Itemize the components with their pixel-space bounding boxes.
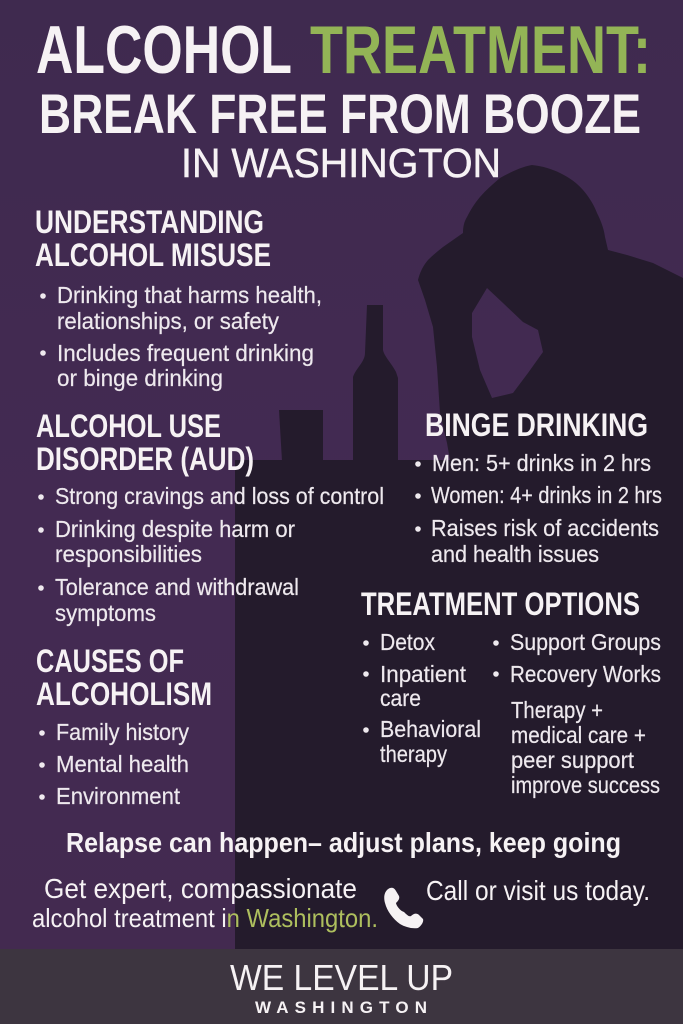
bullet list: binge: Men: 5+ drinks in 2 hrs bbox=[432, 450, 651, 476]
callout: relapse: Relapse can happen– adjust plans, keep going bbox=[66, 827, 621, 858]
heading: alcohol use disorder bbox=[36, 408, 254, 477]
icon: phone bbox=[384, 888, 423, 928]
bullet list: misuse bbox=[40, 282, 322, 391]
bullet list: AUD: Tolerance and withdrawal bbox=[55, 574, 299, 600]
text block: recovery note: peer support bbox=[511, 747, 635, 773]
bullet list: AUD: symptoms bbox=[55, 600, 156, 626]
bullet list: misuse: or binge drinking bbox=[57, 365, 223, 391]
bullet list: binge: and health issues bbox=[431, 541, 599, 567]
logo: washington: WASHINGTON bbox=[255, 998, 427, 1017]
bullet list: misuse: relationships, or safety bbox=[57, 308, 279, 334]
heading: causes of alcoholism bbox=[36, 643, 212, 712]
bullet list: binge bbox=[415, 450, 662, 567]
bullet list: treatment column one: Inpatient bbox=[380, 661, 467, 687]
bullet list: causes: Family history bbox=[56, 719, 189, 745]
bullet list: causes: Environment bbox=[56, 783, 181, 809]
call to action: expert treatment: Get expert, compassionate bbox=[44, 873, 357, 904]
text block: recovery note: medical care + bbox=[511, 722, 646, 748]
footer band bbox=[0, 949, 683, 1024]
bullet list: AUD bbox=[38, 483, 384, 626]
bullet list: AUD: responsibilities bbox=[55, 541, 202, 567]
heading: alcohol use disorder: ALCOHOL USE bbox=[36, 408, 221, 444]
text block: recovery note: improve success bbox=[511, 772, 660, 798]
bullet list: AUD: Drinking despite harm or bbox=[55, 516, 295, 542]
call to action: call or visit: Call or visit us today. bbox=[426, 875, 650, 906]
text block: recovery note bbox=[511, 697, 660, 798]
bullet list: treatment column one: care bbox=[380, 685, 421, 711]
bullet list: treatment column one: therapy bbox=[380, 741, 447, 767]
logo: we level up: WE LEVEL UP bbox=[230, 957, 453, 998]
heading: causes of alcoholism: ALCOHOLISM bbox=[36, 676, 212, 712]
silhouette: person, bottle and table bbox=[235, 165, 683, 949]
bullet list: causes: Mental health bbox=[56, 751, 189, 777]
bullet list: treatment column one: Detox bbox=[380, 629, 435, 655]
bullet list: treatment column one: Behavioral bbox=[380, 716, 481, 742]
silhouette: glass bbox=[279, 410, 323, 461]
heading: understanding alcohol misuse bbox=[35, 204, 271, 273]
call to action: expert treatment bbox=[32, 873, 378, 933]
heading: alcohol use disorder: DISORDER (AUD) bbox=[36, 441, 254, 477]
silhouette: table bbox=[235, 460, 455, 949]
title bbox=[36, 12, 651, 186]
bullet list: misuse: Drinking that harms health, bbox=[57, 282, 322, 308]
panel: treatment options bbox=[361, 586, 661, 798]
bullet list: treatment column two: Support Groups bbox=[510, 629, 661, 655]
silhouette: bottle bbox=[353, 305, 398, 461]
bullet list: treatment column one bbox=[363, 629, 481, 767]
bullet list: treatment column two bbox=[493, 629, 661, 687]
panel: binge drinking bbox=[415, 407, 662, 567]
panel: understanding alcohol misuse bbox=[35, 204, 322, 391]
bullet list: binge: Raises risk of accidents bbox=[431, 515, 659, 541]
silhouette: person with head in hand bbox=[418, 165, 683, 949]
text block: recovery note: Therapy + bbox=[511, 697, 603, 723]
bullet list: AUD: Strong cravings and loss of control bbox=[55, 483, 384, 509]
heading: causes of alcoholism: CAUSES OF bbox=[36, 643, 184, 679]
panel: causes of alcoholism bbox=[36, 643, 212, 809]
call to action: expert treatment: alcohol treatment in Washington. bbox=[32, 903, 378, 933]
heading: understanding alcohol misuse: UNDERSTANDING bbox=[35, 204, 264, 240]
heading: understanding alcohol misuse: ALCOHOL MISUSE bbox=[35, 237, 271, 273]
bullet list: misuse: Includes frequent drinking bbox=[57, 340, 314, 366]
title: IN WASHINGTON bbox=[181, 140, 501, 186]
title: ALCOHOL bbox=[36, 12, 292, 88]
panel: alcohol use disorder bbox=[36, 408, 384, 626]
bullet list: causes bbox=[39, 719, 189, 809]
bullet list: treatment column two: Recovery Works bbox=[510, 661, 661, 687]
